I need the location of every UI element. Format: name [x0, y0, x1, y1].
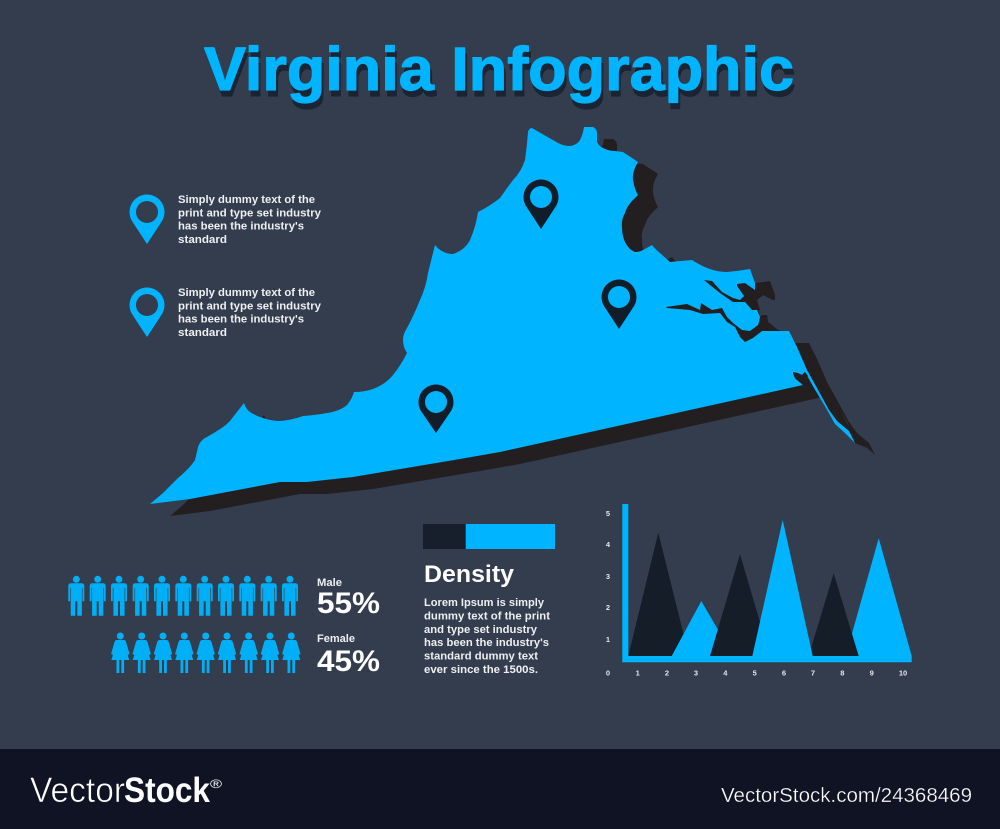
x axis labels: 3	[694, 668, 698, 678]
legend pin 1	[130, 195, 164, 244]
x axis labels: 9	[870, 668, 874, 678]
footer logo: Vector	[30, 771, 125, 810]
footer logo: Stock	[124, 771, 210, 810]
blue peak 2	[672, 601, 733, 656]
map shape	[150, 127, 855, 504]
legend text 1: Simply dummy text of the	[178, 194, 315, 206]
female percentage: 45%	[317, 645, 380, 678]
y axis labels: 2	[606, 603, 610, 612]
density text: dummy text of the print	[424, 610, 550, 622]
x axis labels: 1	[636, 668, 640, 678]
footer logo: ®	[210, 777, 222, 791]
x axis labels: 0	[606, 668, 610, 678]
density text: has been the industry's	[424, 637, 549, 649]
female pictogram row	[111, 632, 300, 673]
x axis labels: 2	[665, 668, 669, 678]
y axis labels: 1	[606, 635, 610, 644]
map pin north	[524, 180, 558, 229]
legend text 1: has been the industry's	[178, 221, 304, 233]
x axis labels: 4	[723, 668, 728, 678]
chart axes	[622, 504, 912, 662]
map pin centre	[602, 280, 636, 329]
legend pin 2	[130, 288, 164, 337]
female label: Female	[317, 633, 355, 645]
legend text 1: standard	[178, 234, 227, 246]
male pictogram row	[68, 576, 298, 616]
legend text 2: Simply dummy text of the	[178, 287, 315, 299]
density bar	[423, 524, 555, 549]
legend text 2: print and type set industry	[178, 300, 322, 312]
x axis labels: 6	[782, 668, 786, 678]
map pin south	[418, 385, 454, 433]
x axis labels: 10	[899, 668, 907, 678]
dark peak 3	[710, 554, 770, 656]
x axis labels: 8	[840, 668, 844, 678]
legend text 2: standard	[178, 327, 227, 339]
map of Virginia	[150, 127, 875, 516]
dark peak 1	[628, 533, 689, 656]
male label: Male	[317, 577, 342, 589]
dark peak 5	[809, 573, 859, 656]
eastern shore shadow	[797, 343, 873, 454]
footer logo	[30, 771, 222, 810]
triangle chart	[606, 504, 912, 678]
density heading: Density	[424, 561, 515, 588]
footer image id: VectorStock.com/24368469	[721, 785, 972, 807]
title: Virginia Infographic	[204, 35, 794, 103]
legend text 2: has been the industry's	[178, 314, 304, 326]
map shadow	[170, 139, 875, 516]
x axis labels: 7	[811, 668, 815, 678]
density text: ever since the 1500s.	[424, 664, 538, 676]
y axis labels: 3	[606, 572, 610, 581]
y axis labels: 5	[606, 509, 610, 518]
footer bar	[0, 749, 1000, 829]
bay gap in shadow	[757, 295, 800, 330]
blue peak 4	[752, 520, 813, 656]
x axis labels: 5	[753, 668, 757, 678]
title: Virginia Infographic	[206, 41, 796, 109]
y axis labels	[606, 509, 611, 644]
legend text 1: print and type set industry	[178, 207, 322, 219]
density text: standard dummy text	[424, 650, 538, 662]
rivers and bay inlets	[666, 280, 808, 385]
y axis labels: 4	[606, 540, 611, 549]
blue peak 6	[846, 538, 912, 656]
x axis labels	[606, 668, 907, 678]
density text: and type set industry	[424, 624, 538, 636]
density text: Lorem Ipsum is simply	[424, 597, 545, 609]
male percentage: 55%	[317, 587, 380, 620]
